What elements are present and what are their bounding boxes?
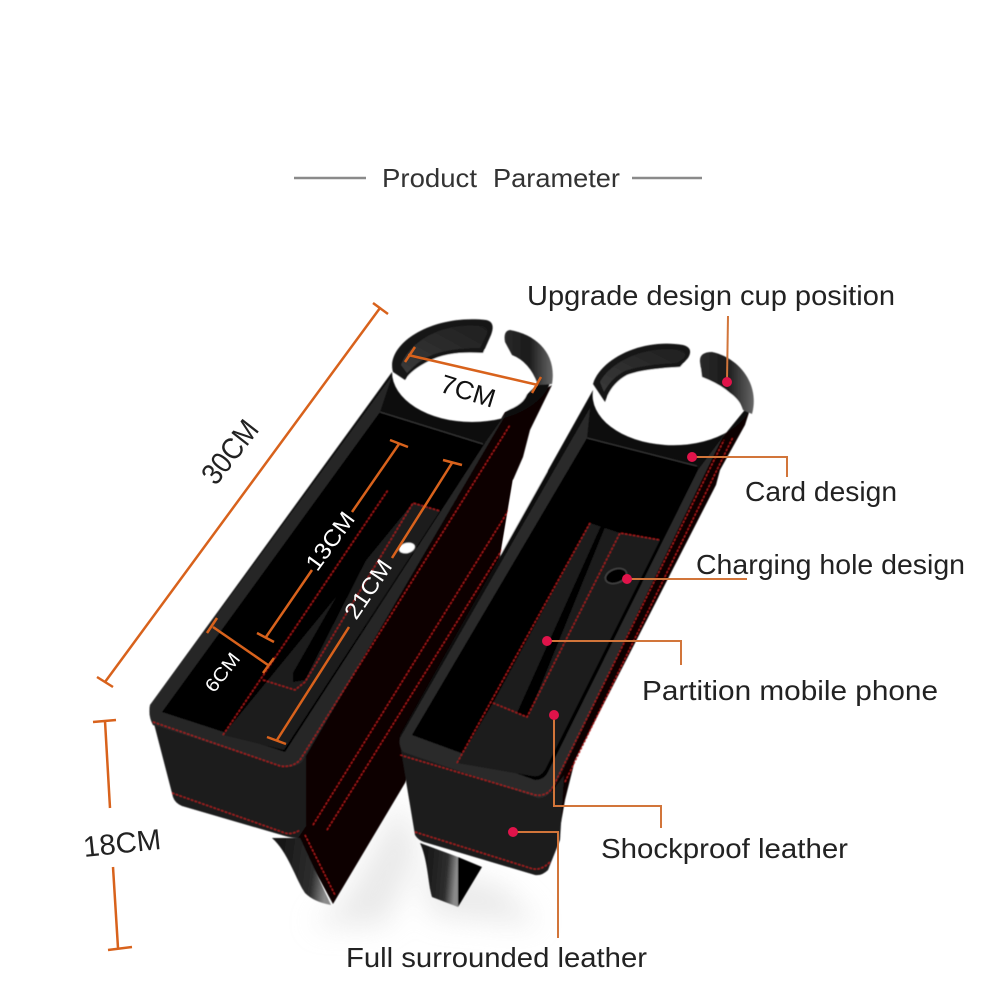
left organizer: cup wall right — [505, 330, 553, 385]
dimension: 21CM: 21CM — [339, 554, 397, 624]
left organizer: stitching — [153, 425, 515, 895]
left organizer: tray interior — [162, 412, 485, 752]
dimension: 18CM: 18CM — [82, 824, 163, 864]
callout: Shockproof leather — [549, 710, 848, 864]
heading: Product Parameter: Product — [382, 163, 478, 193]
dimension: 6CM — [201, 618, 274, 697]
dimension: 30CM — [97, 303, 388, 687]
right organizer: leg shadow side — [458, 857, 482, 907]
dimension: 21CM — [267, 460, 462, 744]
left organizer: body top — [149, 372, 552, 768]
right organizer: cup hole — [600, 351, 746, 443]
callout: Full surrounded leather: Full surrounded leather — [346, 942, 647, 973]
left organizer: front face — [152, 716, 306, 838]
left organizer: cup hole — [399, 334, 535, 424]
right organizer: rim — [399, 408, 722, 798]
right organizer: front face — [400, 745, 564, 875]
organizer: left product — [149, 319, 553, 905]
left organizer: divider — [380, 412, 483, 444]
right organizer: leg — [420, 843, 458, 907]
dimension: 13CM: 13CM — [300, 507, 360, 575]
right organizer: tray interior — [412, 438, 698, 780]
heading rule: right — [632, 177, 702, 179]
dimension: 13CM — [257, 440, 408, 642]
left organizer: leg — [272, 838, 331, 905]
right organizer: white gap — [498, 468, 560, 570]
callout: Shockproof leather: Shockproof leather — [601, 833, 848, 864]
callout: Full surrounded leather — [346, 827, 647, 973]
callout: Card design: Card design — [745, 476, 897, 507]
callout: Charging hole design: Charging hole design — [696, 549, 965, 580]
callout: Partition mobile phone — [542, 636, 938, 706]
heading rule: left — [294, 177, 366, 179]
dimension: 18CM — [82, 720, 163, 950]
dimension: 7CM: 7CM — [437, 368, 499, 414]
dimension: 6CM: 6CM — [201, 649, 245, 697]
left organizer: cup wall left inner — [401, 325, 487, 373]
callout: Upgrade design cup position: Upgrade design cup position — [527, 280, 895, 311]
heading: Product Parameter: Parameter — [493, 163, 620, 193]
right organizer: side panel — [543, 400, 753, 873]
left organizer: rim — [150, 376, 507, 767]
heading: Product Parameter — [382, 163, 620, 193]
right organizer: partition slot — [517, 488, 620, 717]
left organizer: charging hole — [397, 540, 417, 556]
right organizer: cup wall left — [593, 344, 690, 402]
right organizer: cup wall right — [700, 352, 754, 414]
right organizer: charging hole — [603, 566, 629, 586]
right organizer: leather floor — [457, 523, 660, 776]
callout: Partition mobile phone: Partition mobile phone — [642, 675, 938, 706]
callout: Charging hole design — [622, 549, 965, 584]
right organizer: body top — [399, 390, 753, 798]
organizer: right product — [399, 344, 754, 907]
callout: Upgrade design cup position — [527, 280, 895, 387]
left organizer: partition slot — [293, 462, 415, 682]
floor shadow — [310, 800, 540, 925]
left organizer: side panel — [297, 385, 552, 904]
left organizer: leather floor — [223, 503, 440, 750]
right organizer: divider — [587, 438, 697, 466]
dimension: 7CM — [405, 347, 541, 414]
dimension: 30CM: 30CM — [195, 414, 266, 491]
callout: Card design — [687, 452, 897, 507]
left organizer: cup wall left — [392, 319, 493, 380]
right organizer: stitching — [400, 437, 733, 869]
right organizer: cup wall left inner — [600, 349, 685, 392]
